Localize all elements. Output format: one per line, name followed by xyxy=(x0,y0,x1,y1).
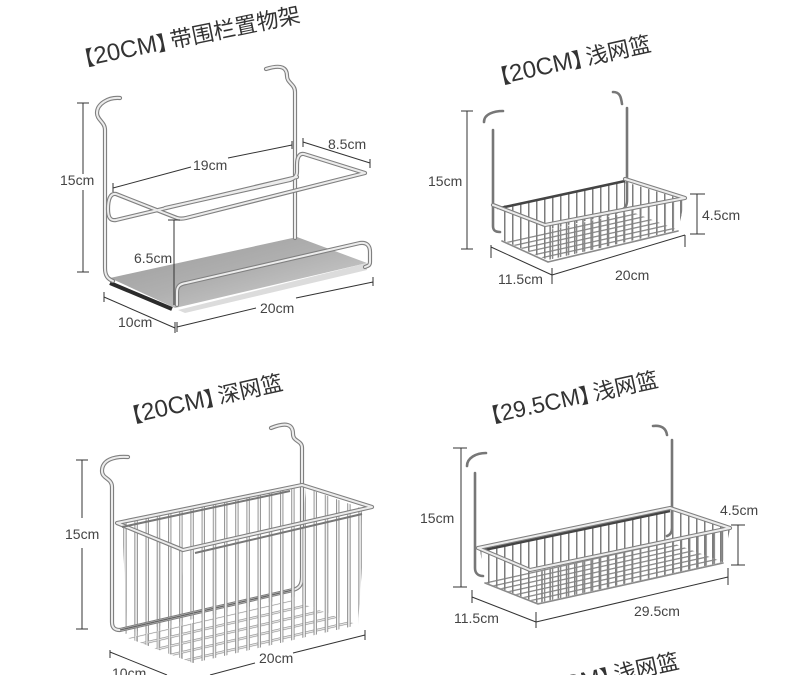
basket rim xyxy=(493,179,685,225)
title: 29.5cm shallow basket: 【29.5CM】浅网篮 xyxy=(479,366,660,430)
dimension: depth 8.5cm: 8.5cm xyxy=(328,136,366,152)
title: 20cm shallow basket: 【20CM】浅网篮 xyxy=(487,30,654,92)
dimension: basket height 4.5cm xyxy=(690,194,740,234)
dimension: height 15cm xyxy=(420,448,467,587)
panel: 20cm rack with rail xyxy=(60,1,373,333)
hanger hooks and posts xyxy=(467,426,672,576)
basket wire mesh xyxy=(497,182,685,262)
dimension: depth 10cm xyxy=(110,650,167,675)
dimension: height 15cm: 15cm xyxy=(65,526,99,542)
right hanger post and hook xyxy=(266,67,295,238)
dimension: height 15cm: 15cm xyxy=(60,172,94,188)
dimension: depth 10cm xyxy=(104,292,175,333)
lower rail xyxy=(177,243,370,305)
basket back and left wire bars xyxy=(122,487,366,663)
panel: 20cm shallow basket xyxy=(428,30,740,287)
title: 20cm deep basket: 【20CM】深网篮 xyxy=(119,369,285,431)
dimension: length 20cm: 20cm xyxy=(259,650,293,666)
hanger hooks and frame xyxy=(102,425,302,630)
dimension: length 29.5cm: 29.5cm xyxy=(634,603,680,619)
title: rack with rail: 【20CM】带围栏置物架 xyxy=(72,1,303,74)
dimension: length 29.5cm xyxy=(536,568,728,622)
basket rim xyxy=(117,485,372,553)
dimension: clearance 6.5cm: 6.5cm xyxy=(134,250,172,266)
basket floor grid xyxy=(128,600,358,663)
panel: 20cm deep basket xyxy=(65,369,372,675)
upper rail xyxy=(108,154,365,220)
dimension: height 15cm: 15cm xyxy=(428,173,462,189)
dimension: depth 11.5cm xyxy=(491,245,552,287)
left hanger post and hook xyxy=(97,98,120,281)
dimension: depth 8.5cm xyxy=(303,136,370,168)
panel: 29.5cm shallow basket xyxy=(420,366,758,628)
dimension: clearance 6.5cm xyxy=(134,220,180,305)
dimension: length 20cm xyxy=(552,235,685,283)
dimension: basket height 4.5cm xyxy=(720,502,758,565)
dimension: height 15cm xyxy=(428,111,473,249)
basket wire mesh xyxy=(480,510,730,604)
basket front wire bars xyxy=(193,513,362,663)
dimension: height 15cm: 15cm xyxy=(420,510,454,526)
dimension: length 20cm xyxy=(210,630,365,675)
dimension: basket height 4.5cm: 4.5cm xyxy=(702,207,740,223)
dimension: length 20cm: 20cm xyxy=(615,267,649,283)
dimension: depth 11.5cm xyxy=(454,590,536,628)
dimension: depth 11.5cm: 11.5cm xyxy=(498,271,543,287)
dimension: height 15cm xyxy=(65,460,99,629)
dimension: height 15cm xyxy=(60,103,94,272)
dimension: length 20cm xyxy=(177,277,373,332)
shelf plate xyxy=(110,237,367,313)
hanger hooks and posts xyxy=(484,92,627,232)
dimension: depth 10cm: 10cm xyxy=(118,314,152,330)
basket rim xyxy=(478,508,730,570)
dimension: depth 11.5cm: 11.5cm xyxy=(454,610,499,626)
dimension: width 19cm: 19cm xyxy=(193,157,227,173)
dimension: length 20cm: 20cm xyxy=(260,300,294,316)
dimension: basket height 4.5cm: 4.5cm xyxy=(720,502,758,518)
dimension: width 19cm xyxy=(113,141,292,192)
